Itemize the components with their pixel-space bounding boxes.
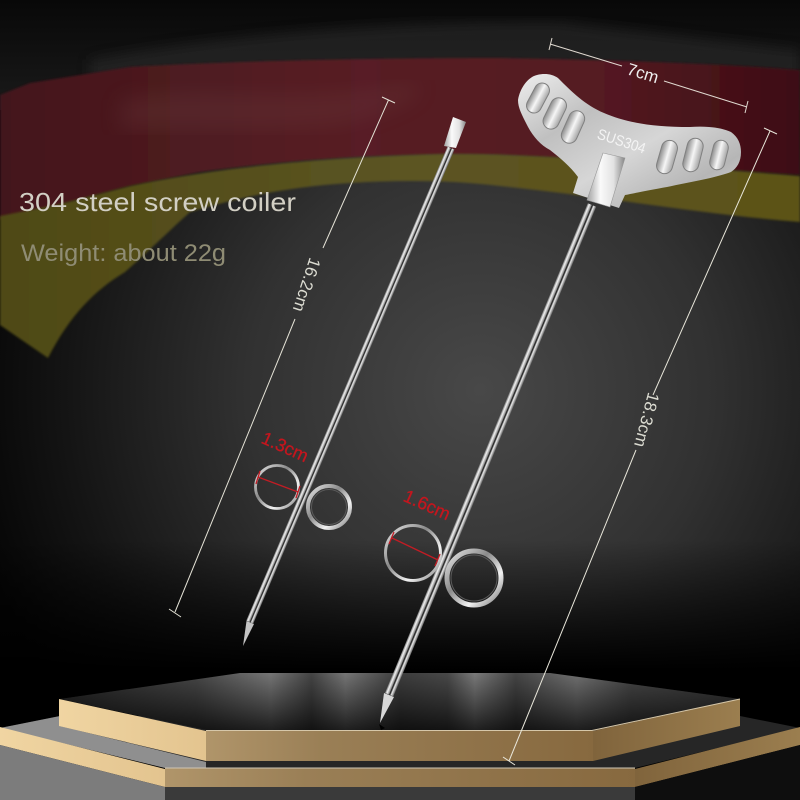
platform	[0, 673, 800, 800]
ring: 1.6cm front	[386, 526, 440, 580]
rings for long rod	[386, 526, 501, 605]
long rod shaft	[385, 203, 596, 696]
platform: lower tier gold	[0, 727, 800, 787]
ring: 1.3cm front	[256, 466, 298, 508]
handle slots	[524, 80, 730, 176]
long rod tip	[380, 693, 394, 723]
platform: top plate gold	[59, 699, 740, 761]
short rod tip	[243, 621, 254, 646]
platform: base sides	[0, 745, 800, 800]
platform: top plate surface	[60, 673, 740, 730]
handle socket	[587, 153, 625, 207]
subtitle: weight: Weight: about 22g	[21, 240, 226, 267]
flag: yellow stripe	[0, 154, 800, 358]
short rod head	[444, 117, 466, 148]
short rod shaft	[246, 147, 454, 624]
flag: red stripe	[0, 58, 800, 220]
long t-handle tool	[379, 74, 741, 730]
dimension: 16.2cm: 16.2cm	[289, 255, 324, 314]
handle engraved text: SUS304	[595, 126, 648, 158]
rings for short rod	[256, 466, 350, 528]
measurement: 1.6cm	[389, 486, 453, 566]
measurement: 1.3cm: 1.3cm	[259, 428, 311, 466]
t-handle plate	[518, 74, 741, 208]
short rod tool	[243, 117, 466, 646]
german flag backdrop	[0, 58, 800, 358]
dimension: 18.3cm	[503, 128, 777, 765]
dimension: 18.3cm: 18.3cm	[630, 390, 663, 449]
dimension: 7cm: 7cm	[625, 60, 661, 87]
ring: 1.6cm side	[447, 551, 501, 605]
ring: 1.3cm side	[308, 486, 350, 528]
measurement: 1.6cm: 1.6cm	[401, 486, 453, 524]
dimension: 16.2cm	[169, 97, 395, 617]
platform: lower tier top	[0, 716, 800, 768]
dimension: 7cm	[549, 38, 748, 113]
title: 304 steel screw coiler: 304 steel screw coiler	[19, 187, 296, 217]
measurement: 1.3cm	[256, 428, 311, 498]
